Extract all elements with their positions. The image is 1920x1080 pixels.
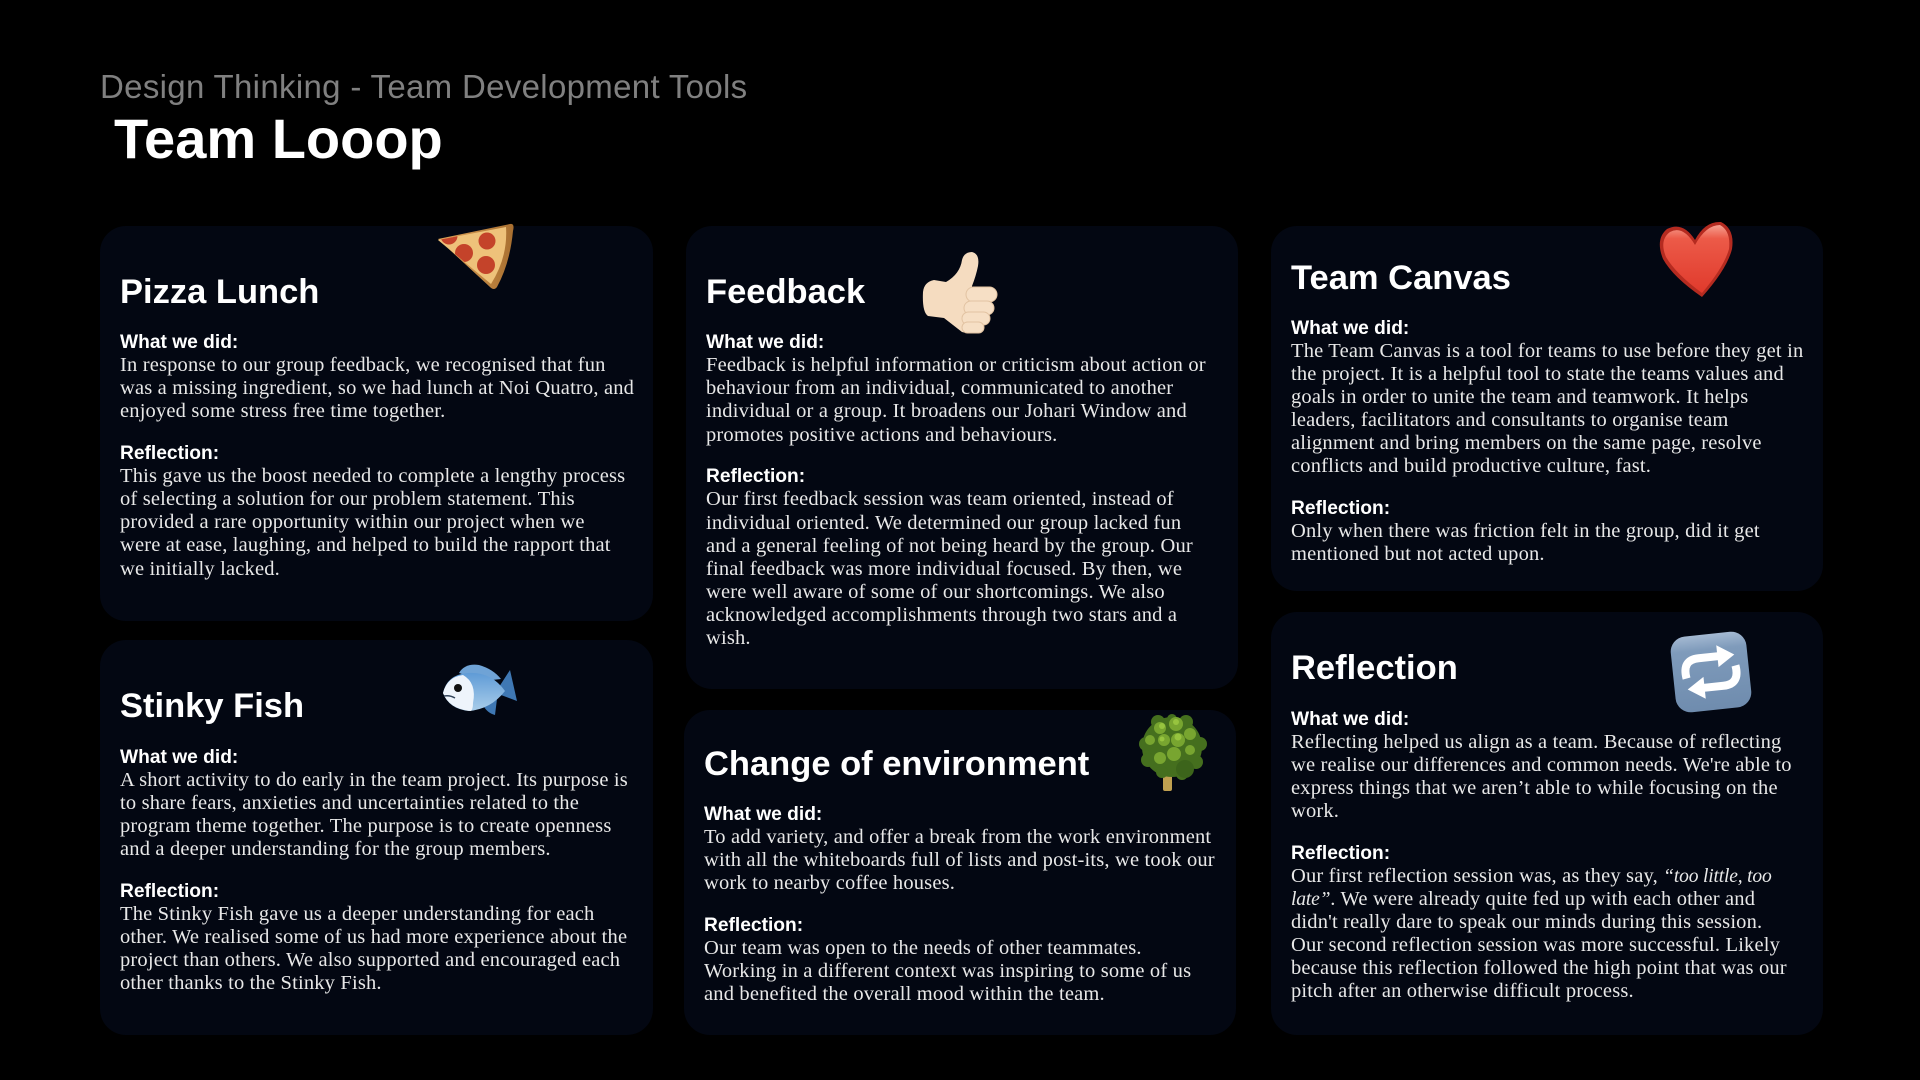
icon: heart xyxy=(1660,222,1732,297)
icon: tree xyxy=(1139,714,1207,791)
text: Feedback body: wish. xyxy=(706,627,751,649)
panel: Pizza Lunch xyxy=(100,226,653,621)
text: Stinky Fish body: other thanks to the Stinky Fish. xyxy=(120,972,382,994)
text: Reflection body: work. xyxy=(1291,800,1339,822)
text: Team Canvas body: The Team Canvas is a tool for teams to use before they get in xyxy=(1291,340,1803,362)
text: Change of environment body: work to nearby coffee houses. xyxy=(704,872,955,894)
text: Team Canvas body: mentioned but not acted upon. xyxy=(1291,543,1545,565)
text: Pizza Lunch body: was a missing ingredient, so we had lunch at Noi Quatro, and xyxy=(120,377,634,399)
text: Change of environment body: To add variety, and offer a break from the work environment xyxy=(704,826,1211,848)
text: Feedback body: Our first feedback session was team oriented, instead of xyxy=(706,488,1174,510)
text: Team Canvas body: Reflection: xyxy=(1291,498,1390,519)
panel: Reflection xyxy=(1271,612,1823,1035)
text: Team Canvas body: Only when there was friction felt in the group, did it get xyxy=(1291,520,1760,542)
text: Stinky Fish body: project than others. We also supported and encouraged each xyxy=(120,949,620,971)
text: Team Canvas body: leaders, facilitators and consultants to organise team xyxy=(1291,409,1728,431)
text: Reflection body: didn't really dare to speak our minds during this session. xyxy=(1291,911,1762,933)
text: Feedback body: What we did: xyxy=(706,332,824,353)
title: Team Looop xyxy=(114,107,443,170)
text: Feedback body: Feedback is helpful information or criticism about action or xyxy=(706,354,1206,376)
text: Team Canvas body: conflicts and build productive culture, fast. xyxy=(1291,455,1651,477)
text: Pizza Lunch body: What we did: xyxy=(120,332,238,353)
text: Feedback body: Reflection: xyxy=(706,466,805,487)
text: Reflection body: express things that we aren’t able to while focusing on the xyxy=(1291,777,1778,799)
text: Reflection body: What we did: xyxy=(1291,708,1409,730)
text: Team Canvas body xyxy=(1291,318,1803,565)
text: Feedback body: and a general feeling of not being heard by the group. Our xyxy=(706,535,1193,557)
text: Change of environment body: Reflection: xyxy=(704,915,803,936)
text: Pizza Lunch body: This gave us the boost needed to complete a lengthy process xyxy=(120,465,625,487)
text: Reflection body: Our second reflection session was more successful. Likely xyxy=(1291,934,1780,956)
icon: thumbs up xyxy=(922,252,998,334)
text: Feedback body: promotes positive actions and behaviours. xyxy=(706,424,1057,446)
heading: Pizza Lunch: Pizza Lunch xyxy=(120,273,319,311)
heading: Team Canvas: Team Canvas xyxy=(1291,259,1511,297)
text: Reflection body: Reflection: xyxy=(1291,843,1390,864)
text: Pizza Lunch body: we initially lacked. xyxy=(120,558,280,580)
text: Stinky Fish body: program theme together. The purpose is to create openness xyxy=(120,815,611,837)
text: Stinky Fish body: other. We realised some of us had more experience about the xyxy=(120,926,627,948)
text: Change of environment body: Our team was open to the needs of other teammates. xyxy=(704,937,1142,959)
heading: Stinky Fish: Stinky Fish xyxy=(120,687,304,725)
text: Stinky Fish body: A short activity to do early in the team project. Its purpose is xyxy=(120,769,628,791)
text: Stinky Fish body: The Stinky Fish gave us a deeper understanding for each xyxy=(120,903,594,925)
text: Feedback body: final feedback was more individual focused. By then, we xyxy=(706,558,1182,580)
text: Team Canvas body: What we did: xyxy=(1291,318,1409,338)
text: Reflection body: Our first reflection session was, as they say, “too little, too xyxy=(1291,865,1772,887)
text: Pizza Lunch body: enjoyed some stress free time together. xyxy=(120,400,445,422)
text: Change of environment body: and benefited the overall mood within the team. xyxy=(704,983,1105,1005)
text: Reflection body: Reflecting helped us align as a team. Because of reflecting xyxy=(1291,731,1781,753)
text: Reflection body xyxy=(1291,708,1792,1002)
panel: Feedback xyxy=(686,226,1238,689)
text: Team Canvas body: goals in order to unite the team and teamwork. It helps xyxy=(1291,386,1748,408)
text: Reflection body: because this reflection followed the high point that was our xyxy=(1291,957,1787,979)
panel: Team Canvas xyxy=(1271,226,1823,591)
text: Feedback body: behaviour from an individual, communicated to another xyxy=(706,377,1173,399)
text: Reflection body: pitch after an otherwise difficult process. xyxy=(1291,980,1634,1002)
text: Change of environment body: What we did: xyxy=(704,804,822,825)
text: Reflection body: we realise our differences and common needs. We're able to xyxy=(1291,754,1792,776)
icon: fish xyxy=(443,664,517,715)
text: Reflection body: late”. We were already quite fed up with each other and xyxy=(1291,888,1755,910)
text: Feedback body xyxy=(706,332,1206,649)
text: Stinky Fish body: to share fears, anxieties and uncertainties related to the xyxy=(120,792,579,814)
text: Stinky Fish body xyxy=(120,746,628,994)
text: Stinky Fish body: and a deeper understanding for the group members. xyxy=(120,838,551,860)
icon: repeat arrows xyxy=(1670,632,1752,712)
text: Team Canvas body: the project. It is a helpful tool to state the teams values and xyxy=(1291,363,1784,385)
text: Stinky Fish body: What we did: xyxy=(120,746,238,768)
text: Pizza Lunch body: Reflection: xyxy=(120,443,219,464)
heading: Change of environment: Change of environment xyxy=(704,745,1089,783)
text: Pizza Lunch body: In response to our group feedback, we recognised that fun xyxy=(120,354,606,376)
text: Change of environment body xyxy=(704,804,1215,1005)
text: Change of environment body: with all the whiteboards full of lists and post-its, we took our xyxy=(704,849,1215,871)
text: Feedback body: individual or a group. It broadens our Johari Window and xyxy=(706,400,1187,422)
text: Feedback body: individual oriented. We determined our group lacked fun xyxy=(706,512,1181,534)
heading: Feedback: Feedback xyxy=(706,273,865,311)
text: Pizza Lunch body: of selecting a solution for our problem statement. This xyxy=(120,488,575,510)
text: Pizza Lunch body xyxy=(120,332,634,580)
text: Feedback body: were well aware of some of our shortcomings. We also xyxy=(706,581,1165,603)
subtitle: Design Thinking - Team Development Tools xyxy=(100,68,747,105)
text: Change of environment body: Working in a different context was inspiring to some of us xyxy=(704,960,1191,982)
text: Pizza Lunch body: provided a rare opportunity within our project when we xyxy=(120,511,585,533)
icon: pizza xyxy=(438,224,514,289)
text: Feedback body: acknowledged accomplishments through two stars and a xyxy=(706,604,1177,626)
text: Pizza Lunch body: were at ease, laughing, and helped to build the rapport that xyxy=(120,534,611,556)
text: Stinky Fish body: Reflection: xyxy=(120,881,219,902)
panel: Stinky Fish xyxy=(100,640,653,1035)
heading: Reflection: Reflection xyxy=(1291,649,1458,687)
text: Team Canvas body: alignment and bring members on the same page, resolve xyxy=(1291,432,1762,454)
panel: Change of environment xyxy=(684,710,1236,1035)
